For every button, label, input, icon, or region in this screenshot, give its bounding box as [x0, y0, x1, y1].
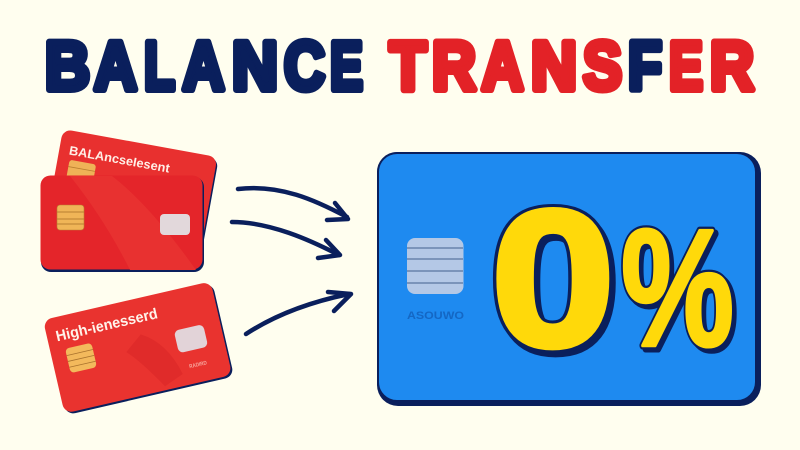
panel: blue 0% card	[377, 152, 761, 406]
card: back red card with label	[45, 129, 219, 254]
title: E	[669, 28, 703, 104]
card window: lower card	[174, 324, 208, 353]
big 0: 0	[491, 170, 615, 388]
percent sign: %	[621, 196, 734, 382]
title: F	[628, 28, 662, 104]
arrow: top	[238, 188, 348, 220]
title: A	[182, 28, 224, 104]
title: R	[432, 28, 476, 104]
percent sign: %	[624, 198, 737, 384]
chip: lower card	[65, 343, 97, 373]
arrow: bottom	[246, 292, 351, 334]
title: T	[390, 28, 426, 104]
title: E	[330, 28, 363, 104]
percent sign: %	[621, 196, 734, 382]
small card code: RADIRD	[189, 360, 208, 370]
card label: High: High-ienesserd	[54, 305, 159, 345]
card: lower red card	[43, 281, 234, 415]
card window: front card	[160, 214, 190, 235]
title: N	[531, 28, 577, 104]
chip: blue card	[407, 238, 464, 294]
title: C	[284, 28, 325, 104]
title: A	[482, 28, 524, 104]
arrow: middle	[232, 222, 340, 258]
title: A	[94, 28, 137, 104]
title: S	[583, 28, 622, 104]
card code: ASOUWO	[407, 310, 464, 322]
card: front red card	[40, 176, 204, 272]
title: N	[232, 28, 278, 104]
title: L	[144, 28, 175, 104]
title	[45, 28, 754, 104]
chip: front card	[57, 205, 84, 230]
big 0: 0	[491, 170, 615, 388]
chip: back card	[66, 160, 96, 184]
big 0: 0	[494, 174, 618, 392]
title: R	[710, 28, 754, 104]
title: B	[45, 28, 90, 104]
card label: BALAN: BALAncseIesent	[68, 144, 172, 176]
